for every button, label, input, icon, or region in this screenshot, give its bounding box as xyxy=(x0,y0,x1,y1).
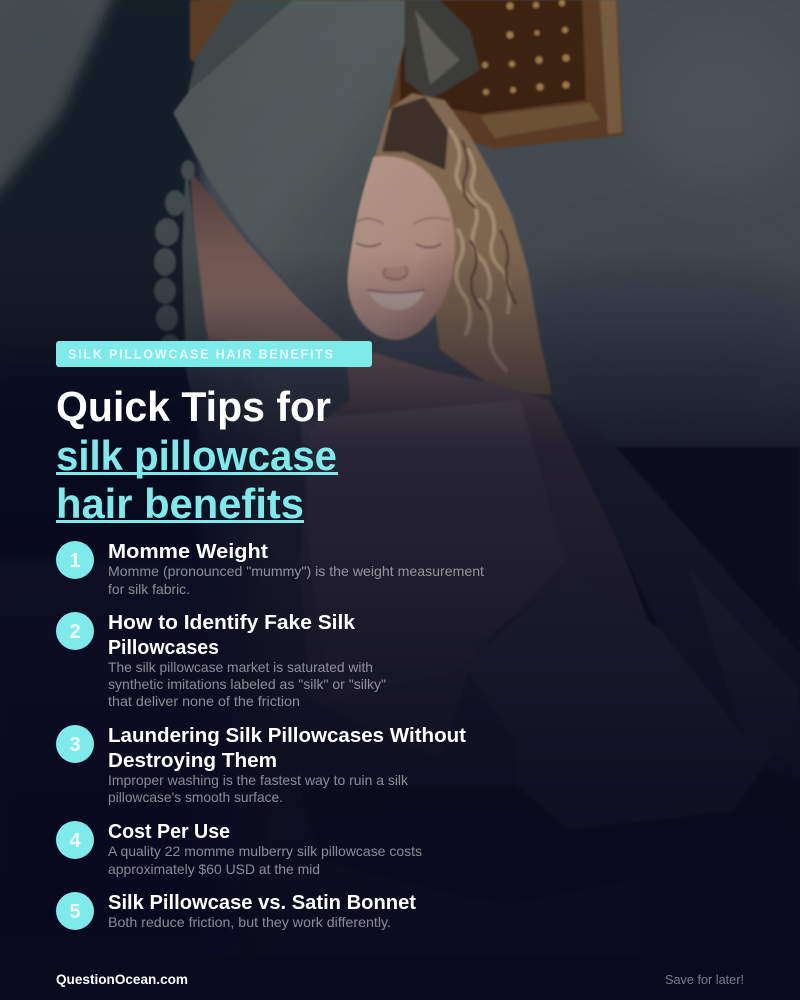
footer call to action: Save for later! xyxy=(665,972,744,987)
upper blanket xyxy=(173,0,405,342)
tip 2: How to Identify Fake Silk Pillowcases: The silk pillowcase market is saturated with xyxy=(108,659,373,675)
footer brand: QuestionOcean.com xyxy=(56,971,188,987)
tip 1: Momme Weight: 1 xyxy=(69,550,81,572)
main heading: Quick Tips for xyxy=(56,383,331,430)
tip 2: How to Identify Fake Silk Pillowcases: 2 xyxy=(69,621,81,643)
face xyxy=(347,156,455,340)
pompom trim xyxy=(154,160,270,560)
hair xyxy=(372,93,552,395)
tip 4: Cost Per Use: Cost Per Use xyxy=(108,821,230,843)
tip 3: Laundering Silk Pillowcases Without Destroying Them: pillowcase's smooth surface. xyxy=(108,789,283,805)
tip 3: Laundering Silk Pillowcases Without Destroying Them: Laundering Silk Pillowcases Without xyxy=(108,725,466,747)
tip 2: How to Identify Fake Silk Pillowcases: How to Identify Fake Silk xyxy=(108,612,356,634)
lower pillow xyxy=(463,572,777,829)
tip 2: How to Identify Fake Silk Pillowcases xyxy=(56,612,386,709)
tip 3: Laundering Silk Pillowcases Without Destroying Them xyxy=(56,725,466,805)
tip 1: Momme Weight: Momme (pronounced "mummy") is the weight measurement xyxy=(108,563,484,579)
arm and torso xyxy=(190,170,650,760)
tip 1: Momme Weight: Momme Weight xyxy=(108,541,268,563)
tip 4: Cost Per Use: 4 xyxy=(69,830,81,852)
tip 3: Laundering Silk Pillowcases Without Destroying Them: Destroying Them xyxy=(108,750,277,772)
dark curtain shadow xyxy=(0,0,200,560)
main heading xyxy=(56,383,338,527)
shorts xyxy=(300,786,640,915)
tip 1: Momme Weight xyxy=(56,541,484,597)
right draped blanket xyxy=(550,400,800,780)
dark bed area xyxy=(600,447,800,1000)
legs xyxy=(270,880,640,960)
tip 2: How to Identify Fake Silk Pillowcases: Pillowcases xyxy=(108,637,219,659)
tip 2: How to Identify Fake Silk Pillowcases: that deliver none of the friction xyxy=(108,693,300,709)
tip 5: Silk Pillowcase vs. Satin Bonnet: 5 xyxy=(69,901,81,923)
footer band xyxy=(0,956,800,1000)
category badge: SILK PILLOWCASE HAIR BENEFITS xyxy=(68,348,333,362)
tip 5: Silk Pillowcase vs. Satin Bonnet: Both reduce friction, but they work differently. xyxy=(108,914,391,930)
tip 1: Momme Weight: for silk fabric. xyxy=(108,581,190,597)
tip 3: Laundering Silk Pillowcases Without Destroying Them: 3 xyxy=(69,734,81,756)
main heading: silk pillowcase xyxy=(56,432,337,479)
tip 4: Cost Per Use: A quality 22 momme mulberry silk pillowcase costs xyxy=(108,843,422,859)
main heading: hair benefits xyxy=(56,480,304,527)
picture frame xyxy=(190,0,624,149)
tip 4: Cost Per Use xyxy=(56,821,422,877)
tip 5: Silk Pillowcase vs. Satin Bonnet xyxy=(56,892,416,930)
category badge xyxy=(56,341,372,367)
tip 3: Laundering Silk Pillowcases Without Destroying Them: Improper washing is the fastest way to ruin a silk xyxy=(108,772,409,788)
tip 2: How to Identify Fake Silk Pillowcases: synthetic imitations labeled as "silk" or "silky" xyxy=(108,676,386,692)
tip 5: Silk Pillowcase vs. Satin Bonnet: Silk Pillowcase vs. Satin Bonnet xyxy=(108,892,416,914)
tip 4: Cost Per Use: approximately $60 USD at the mid xyxy=(108,861,320,877)
